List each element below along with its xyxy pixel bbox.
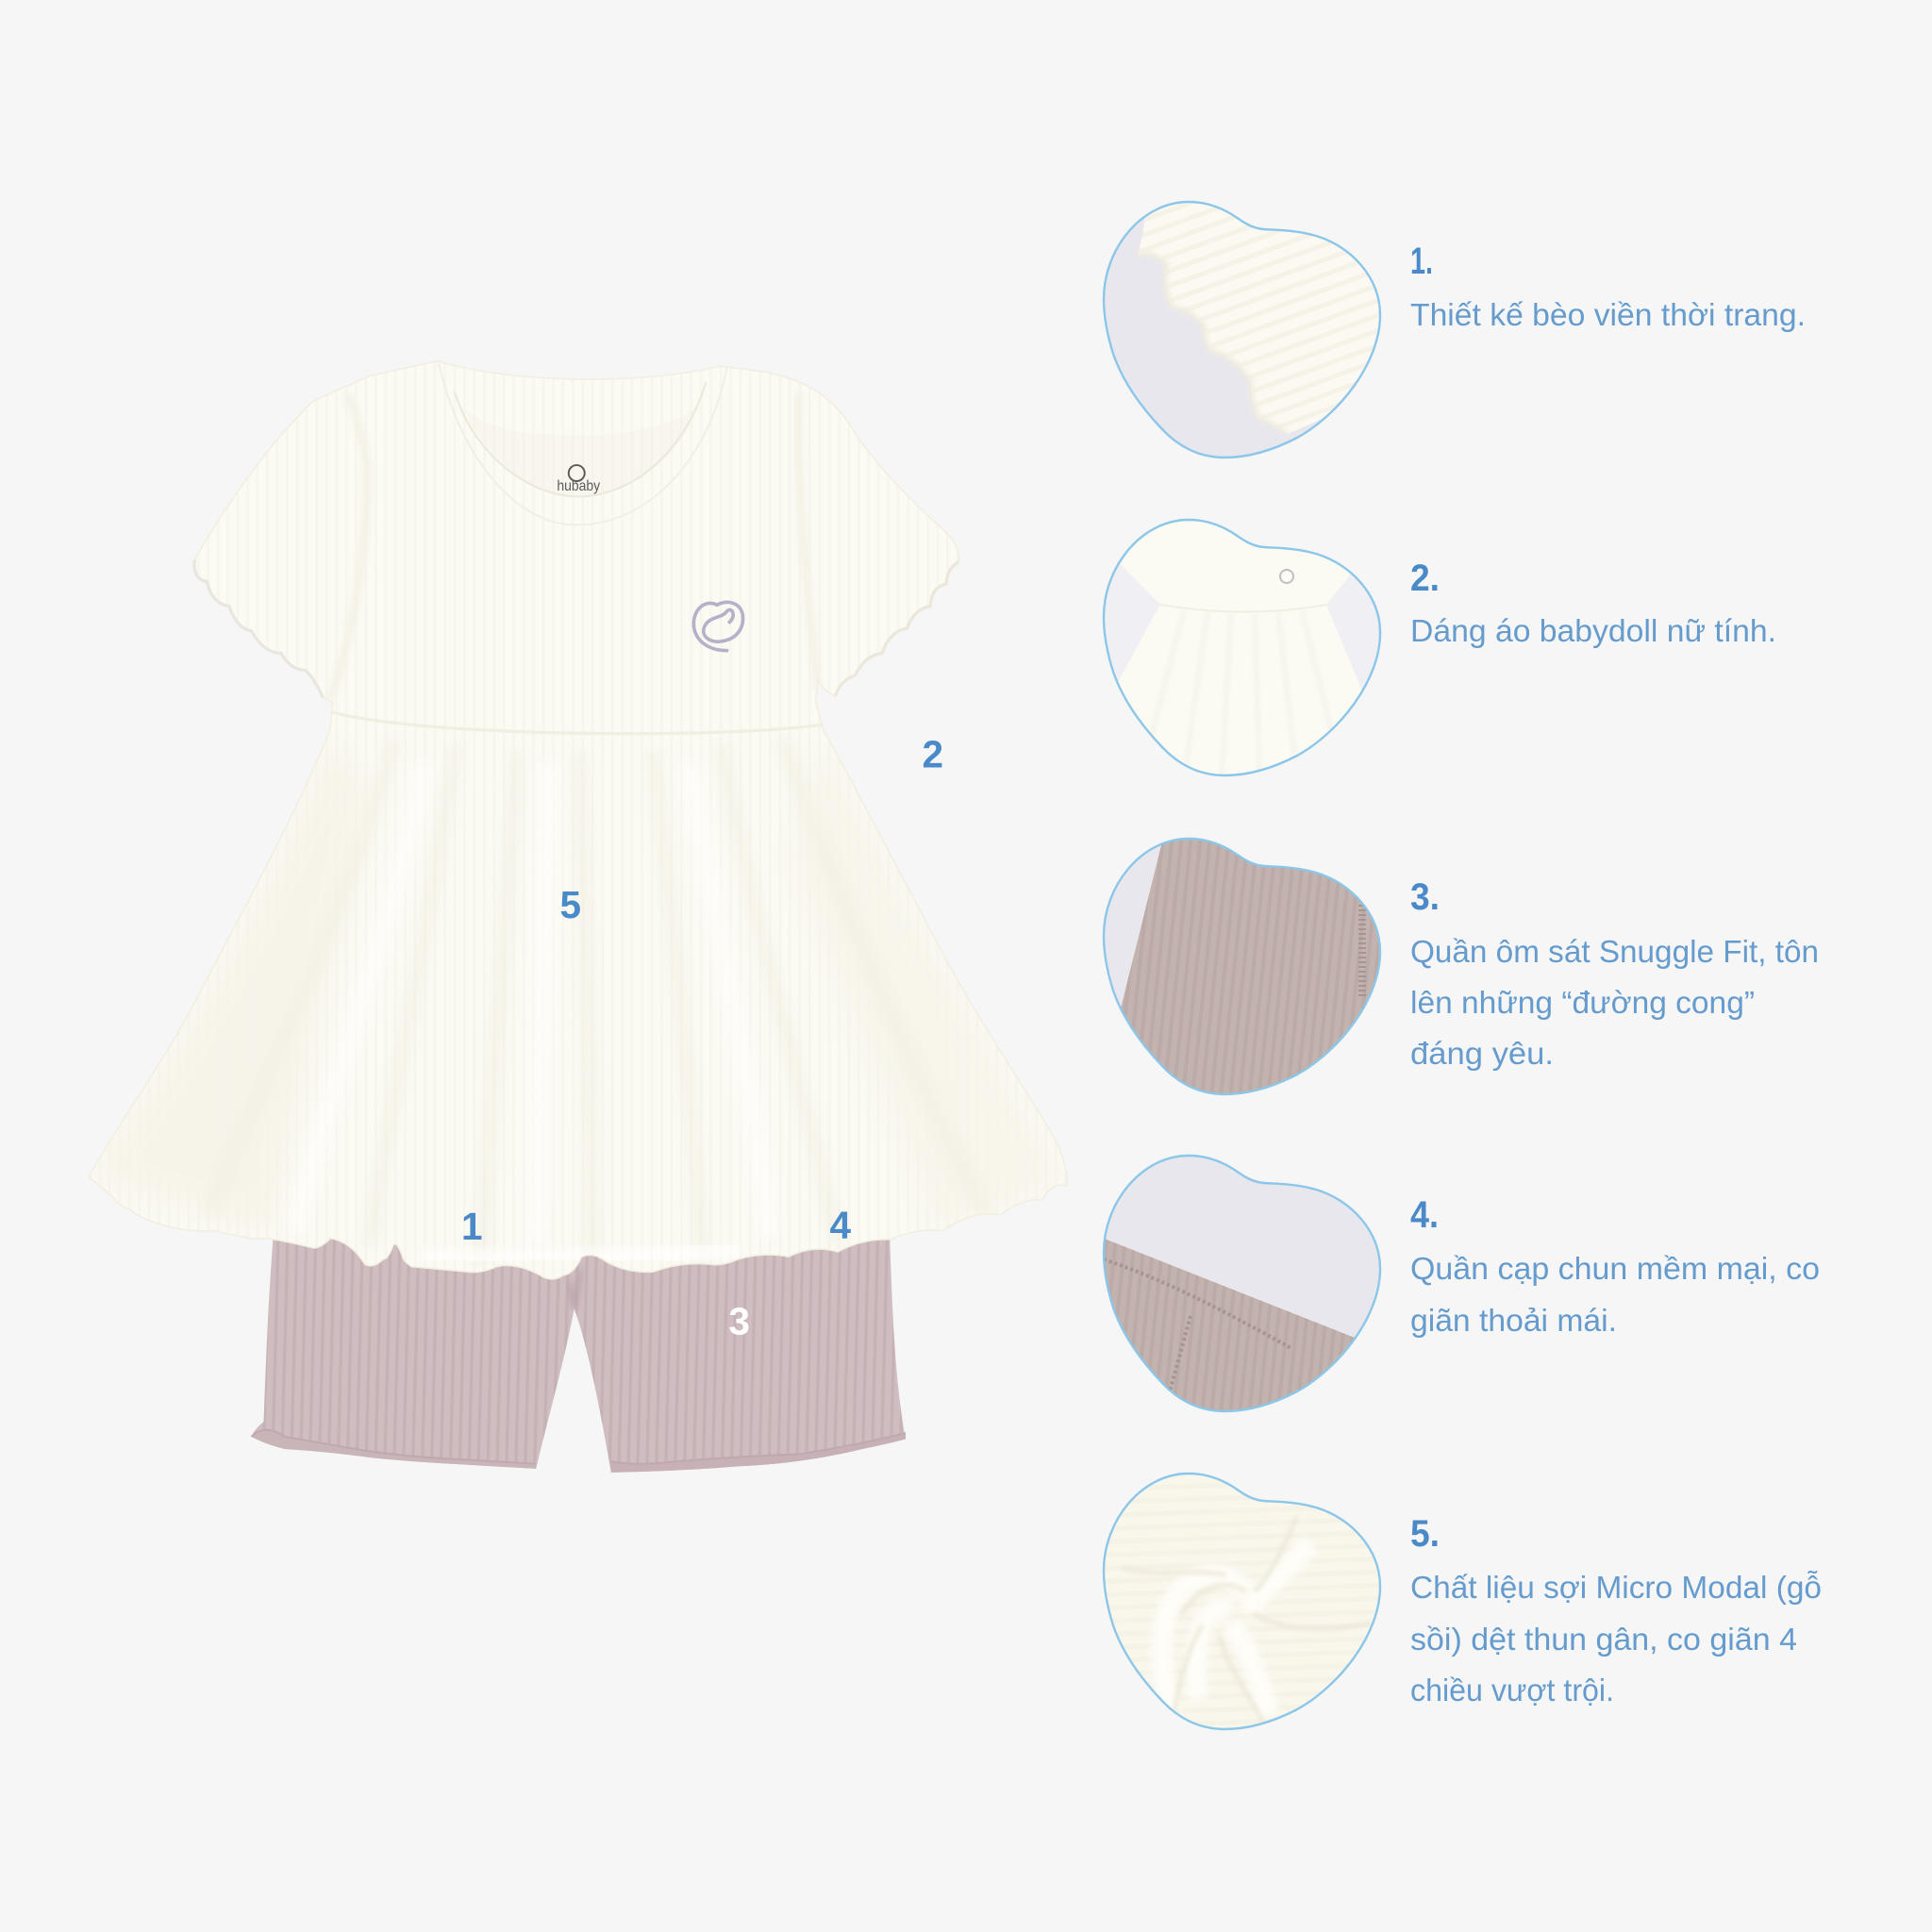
text block 3: 3. [1410,876,1440,918]
text block 4 [1410,1194,1820,1338]
shorts [251,1232,906,1473]
waist seam [333,712,823,734]
text block 3 [1410,876,1819,1071]
embroidered logo [693,602,743,651]
text block 3: Quần ôm sát Snuggle Fit, tôn [1410,934,1819,969]
hem highlight [419,1247,740,1259]
sleeve shading [330,394,368,700]
text block 5: 5. [1410,1513,1440,1555]
text block 4: giãn thoải mái. [1410,1303,1617,1338]
text block 5: Chất liệu sợi Micro Modal (gỗ [1410,1570,1822,1605]
text block 2 [1410,558,1776,648]
left and right skirt shading [121,779,349,1208]
text block 4: Quần cạp chun mềm mại, co [1410,1251,1820,1286]
marker 4: 4 [830,1204,852,1247]
text block 5 [1410,1513,1822,1707]
marker 5: 5 [559,883,581,926]
text block 1: Thiết kế bèo viền thời trang. [1410,297,1806,332]
marker 2: 2 [922,733,943,776]
dress [74,345,1084,1293]
text block 1: 1. [1410,241,1433,282]
neck label [557,465,600,494]
text block 4: 4. [1410,1194,1439,1236]
detail 5: heart photo of fabric swirl [1102,1472,1382,1731]
detail 2: heart photo of babydoll shape [1102,515,1382,784]
neck label: hubaby [557,478,600,494]
product photo: dress and shorts [74,345,1084,1473]
detail 3: heart photo of shorts fabric [1102,834,1387,1103]
text block 3: lên những “đường cong” [1410,985,1755,1020]
skirt folds [372,752,834,1245]
text block 5: sồi) dệt thun gân, co giãn 4 [1410,1622,1797,1657]
text block 2: 2. [1410,558,1440,599]
text block 5: chiều vượt trội. [1410,1673,1614,1707]
detail 1: heart photo of ruffled sleeve [1102,197,1387,459]
neck opening [464,409,695,496]
marker 3: 3 [728,1300,750,1343]
text block 2: Dáng áo babydoll nữ tính. [1410,613,1776,648]
marker 1: 1 [461,1205,483,1248]
text block 1 [1410,241,1806,332]
detail 4: heart photo of elastic waistband [1102,1154,1382,1420]
text block 3: đáng yêu. [1410,1036,1554,1071]
